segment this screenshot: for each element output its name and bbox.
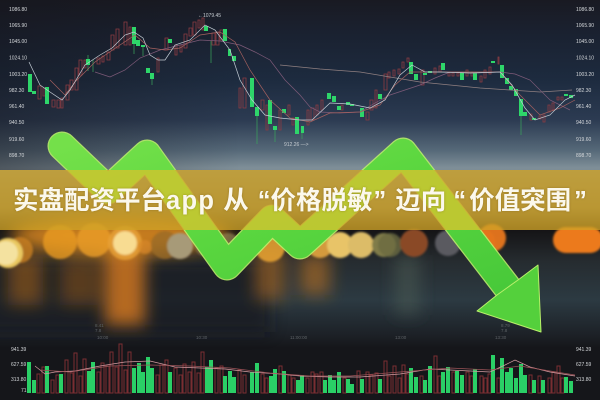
- price callouts: [198, 13, 309, 148]
- top left shade: [0, 0, 600, 170]
- right price axis: 982.30: [576, 88, 592, 94]
- arrow tint inside banner: [68, 170, 480, 230]
- price callouts: ←1079.45: [198, 13, 221, 19]
- left price axis: 919.60: [9, 137, 25, 143]
- time axis: 13:00: [395, 335, 407, 340]
- time axis: 10:00: [97, 335, 109, 340]
- title text: ”: [374, 187, 386, 215]
- left price axis: 1003.20: [9, 72, 27, 78]
- right price axis: [576, 7, 594, 159]
- time axis: 8.79: [501, 323, 510, 328]
- right price axis: 940.50: [576, 120, 592, 126]
- left volume axis: 627.59: [11, 362, 27, 368]
- left price axis: 961.40: [9, 104, 25, 110]
- left volume axis: 941.39: [11, 347, 27, 353]
- right price axis: 1024.10: [576, 56, 594, 62]
- title text: 价值突围: [469, 187, 571, 215]
- right price axis: 919.60: [576, 137, 592, 143]
- time axis: 11:00:00: [290, 335, 308, 340]
- hollow red candles: [38, 18, 563, 130]
- right price axis: 1045.00: [576, 39, 594, 45]
- right volume axis: 941.39: [576, 347, 592, 353]
- left price axis: 1045.00: [9, 39, 27, 45]
- left price axis: 1065.90: [9, 23, 27, 29]
- left price axis: 898.70: [9, 153, 25, 159]
- volume moving averages: [35, 360, 575, 377]
- green volume bars: [27, 355, 573, 393]
- title text: “: [258, 187, 271, 215]
- left price axis: [9, 7, 27, 159]
- title text: ”: [574, 187, 587, 215]
- volume bar chart: [27, 344, 575, 393]
- title text: [13, 186, 587, 216]
- price callouts: 912.26 —>: [284, 142, 309, 148]
- green filled candles: [28, 26, 573, 134]
- title text: 迈向: [395, 187, 446, 215]
- left volume axis: [11, 347, 27, 394]
- time axis: 7.8: [501, 328, 508, 333]
- right price axis: 1086.80: [576, 7, 594, 13]
- title text: “: [453, 187, 466, 215]
- left price axis: 1024.10: [9, 56, 27, 62]
- hollow red volume bars: [37, 344, 564, 393]
- title text: 从: [223, 187, 249, 215]
- left price axis: 940.50: [9, 120, 25, 126]
- right price axis: 1003.20: [576, 72, 594, 78]
- left price axis: 1086.80: [9, 7, 27, 13]
- title text: 实盘配资平台 价格脱敏: [13, 187, 373, 215]
- candle wicks: [88, 27, 521, 144]
- left volume axis: 71: [21, 388, 27, 394]
- time axis: 8.41: [95, 323, 104, 328]
- right volume axis: [576, 347, 592, 383]
- right volume axis: 627.59: [576, 362, 592, 368]
- bokeh lights: [0, 215, 600, 325]
- time axis: [95, 323, 510, 340]
- left volume axis: 313.80: [11, 377, 27, 383]
- time axis: 7.8: [95, 328, 102, 333]
- lower left shade: [0, 262, 270, 332]
- right price axis: 961.40: [576, 104, 592, 110]
- green zigzag down arrow: [62, 146, 541, 332]
- moving average lines: [29, 25, 575, 122]
- time axis: 13:30: [495, 335, 507, 340]
- candlestick chart: [28, 13, 575, 148]
- time axis: 10:30: [196, 335, 208, 340]
- left price axis: 982.30: [9, 88, 25, 94]
- title text: app: [166, 187, 215, 215]
- right price axis: 898.70: [576, 153, 592, 159]
- title banner: [0, 170, 600, 230]
- right volume axis: 313.80: [576, 377, 592, 383]
- right price axis: 1065.90: [576, 23, 594, 29]
